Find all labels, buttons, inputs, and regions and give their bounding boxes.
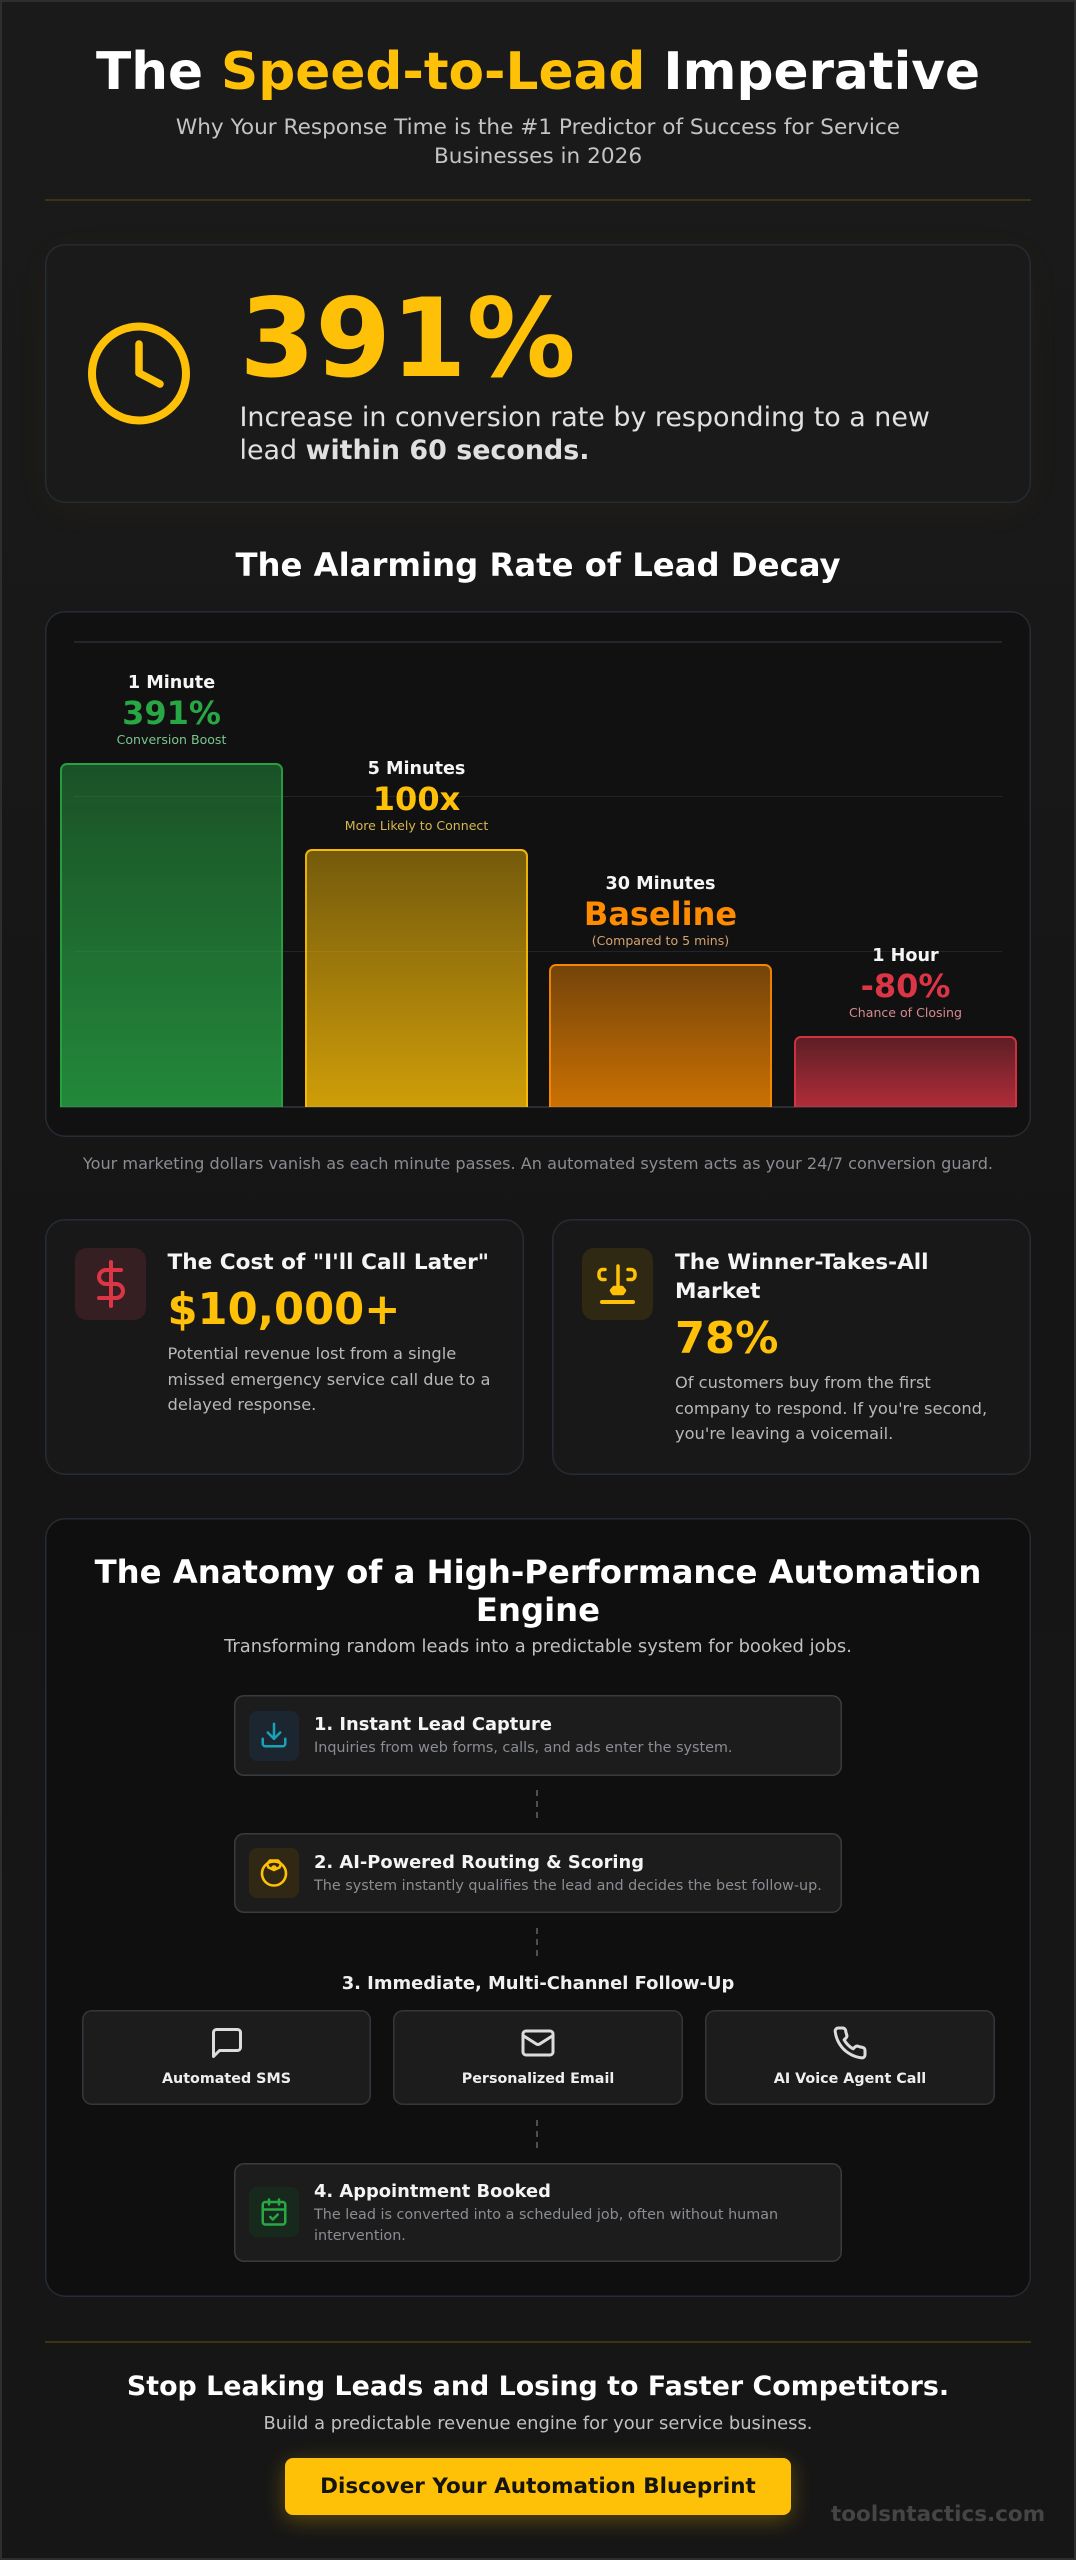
bar: 5 minutes: 5 Minutes [368, 759, 465, 779]
big number: 391% [240, 274, 576, 402]
bar: 30 minutes: 30 Minutes [605, 874, 716, 894]
card text: delayed response. [168, 1395, 316, 1414]
channel: voice call [705, 2010, 995, 2105]
bar: 5 minutes: 100x [373, 780, 460, 818]
bar: 5 minutes [305, 759, 528, 1107]
channel label: AI Voice Agent Call [774, 2071, 926, 2087]
card heading: The Winner-Takes-All [675, 1250, 929, 1274]
step text: Inquiries from web forms, calls, and ads enter the system. [314, 1740, 732, 1756]
bar: 1 minute: 391% [122, 694, 221, 732]
call to action button [285, 2458, 791, 2515]
card text [168, 1344, 490, 1414]
bar: 1 minute: 1 Minute [128, 673, 215, 693]
subtitle [176, 114, 900, 168]
panel: hero statistic [45, 244, 1031, 503]
engine heading [94, 1553, 981, 1629]
engine heading: Engine [476, 1591, 600, 1629]
card statistic: 78% [675, 1314, 778, 1364]
icon: message [212, 2028, 242, 2058]
step title: 1. Instant Lead Capture [314, 1714, 552, 1735]
engine heading: The Anatomy of a High-Performance Automation [95, 1553, 981, 1591]
subtitle: Why Your Response Time is the #1 Predictor of Success for Service [176, 114, 900, 140]
icon: clock [88, 322, 190, 424]
step title: 4. Appointment Booked [314, 2181, 551, 2202]
step text [314, 2206, 778, 2244]
card heading [675, 1250, 929, 1304]
card heading: The Cost of "I'll Call Later" [168, 1250, 489, 1274]
card text: Of customers buy from the first [675, 1373, 931, 1392]
step text: The system instantly qualifies the lead and decides the best follow-up. [314, 1878, 822, 1894]
card text: you're leaving a voicemail. [675, 1424, 893, 1443]
step title: 2. AI-Powered Routing & Scoring [314, 1852, 644, 1873]
icon: download [249, 1711, 299, 1761]
panel: cost card [45, 1219, 524, 1475]
channel: sms [82, 2010, 371, 2105]
icon: mail [521, 2030, 555, 2056]
icon: dollar [75, 1248, 146, 1320]
icon: ai brain [249, 1848, 299, 1898]
panel: automation engine [45, 1518, 1031, 2297]
subtitle: Businesses in 2026 [434, 144, 642, 168]
hero description: lead within 60 seconds. [240, 435, 589, 466]
card text [675, 1373, 987, 1443]
step 3 heading: 3. Immediate, Multi-Channel Follow-Up [342, 1973, 734, 1994]
channel label: Personalized Email [462, 2071, 614, 2087]
step text: The lead is converted into a scheduled job, often without human [314, 2206, 778, 2222]
title: The Speed-to-Lead Imperative [96, 42, 980, 102]
step 4 [234, 2163, 842, 2262]
call to action text: Build a predictable revenue engine for your service business. [263, 2413, 812, 2434]
bar: 1 hour: Chance of Closing [849, 1004, 962, 1020]
step 2 [234, 1833, 842, 1913]
bar: 1 hour [794, 946, 1017, 1107]
step text: intervention. [314, 2228, 406, 2244]
bar: 30 minutes: Baseline [584, 894, 737, 932]
channel: email [393, 2010, 683, 2105]
bar: 5 minutes: More Likely to Connect [345, 818, 488, 832]
step 1 [234, 1695, 842, 1776]
bar: 30 minutes [549, 874, 772, 1107]
bar: 1 minute: Conversion Boost [117, 732, 226, 746]
call to action button: Discover Your Automation Blueprint [320, 2474, 756, 2499]
bar: 30 minutes: (Compared to 5 mins) [592, 932, 729, 948]
hero description: Increase in conversion rate by responding to a new [240, 402, 930, 433]
card text: company to respond. If you're second, [675, 1399, 987, 1418]
card heading: Market [675, 1278, 760, 1304]
channel label: Automated SMS [162, 2071, 291, 2087]
bar: 1 hour: 1 Hour [872, 946, 939, 966]
bar: 1 hour: -80% [861, 966, 950, 1004]
card text: missed emergency service call due to a [168, 1370, 490, 1389]
chart note: Your marketing dollars vanish as each minute passes. An automated system acts as your 24/7 conversion guard. [83, 1154, 993, 1173]
bar: 1 minute [60, 673, 283, 1107]
card text: Potential revenue lost from a single [168, 1344, 456, 1363]
card statistic: $10,000+ [168, 1285, 400, 1335]
engine subtitle: Transforming random leads into a predictable system for booked jobs. [224, 1636, 852, 1656]
icon: phone [834, 2026, 866, 2060]
hero description [240, 402, 930, 466]
call to action heading: Stop Leaking Leads and Losing to Faster Competitors. [127, 2371, 949, 2402]
panel: lead decay chart [45, 611, 1031, 1137]
icon: calendar [249, 2187, 299, 2237]
panel: winner card [552, 1219, 1031, 1475]
icon: scale [582, 1248, 653, 1320]
section heading: lead decay: The Alarming Rate of Lead Decay [235, 546, 841, 584]
watermark: toolsntactics.com [831, 2502, 1045, 2527]
